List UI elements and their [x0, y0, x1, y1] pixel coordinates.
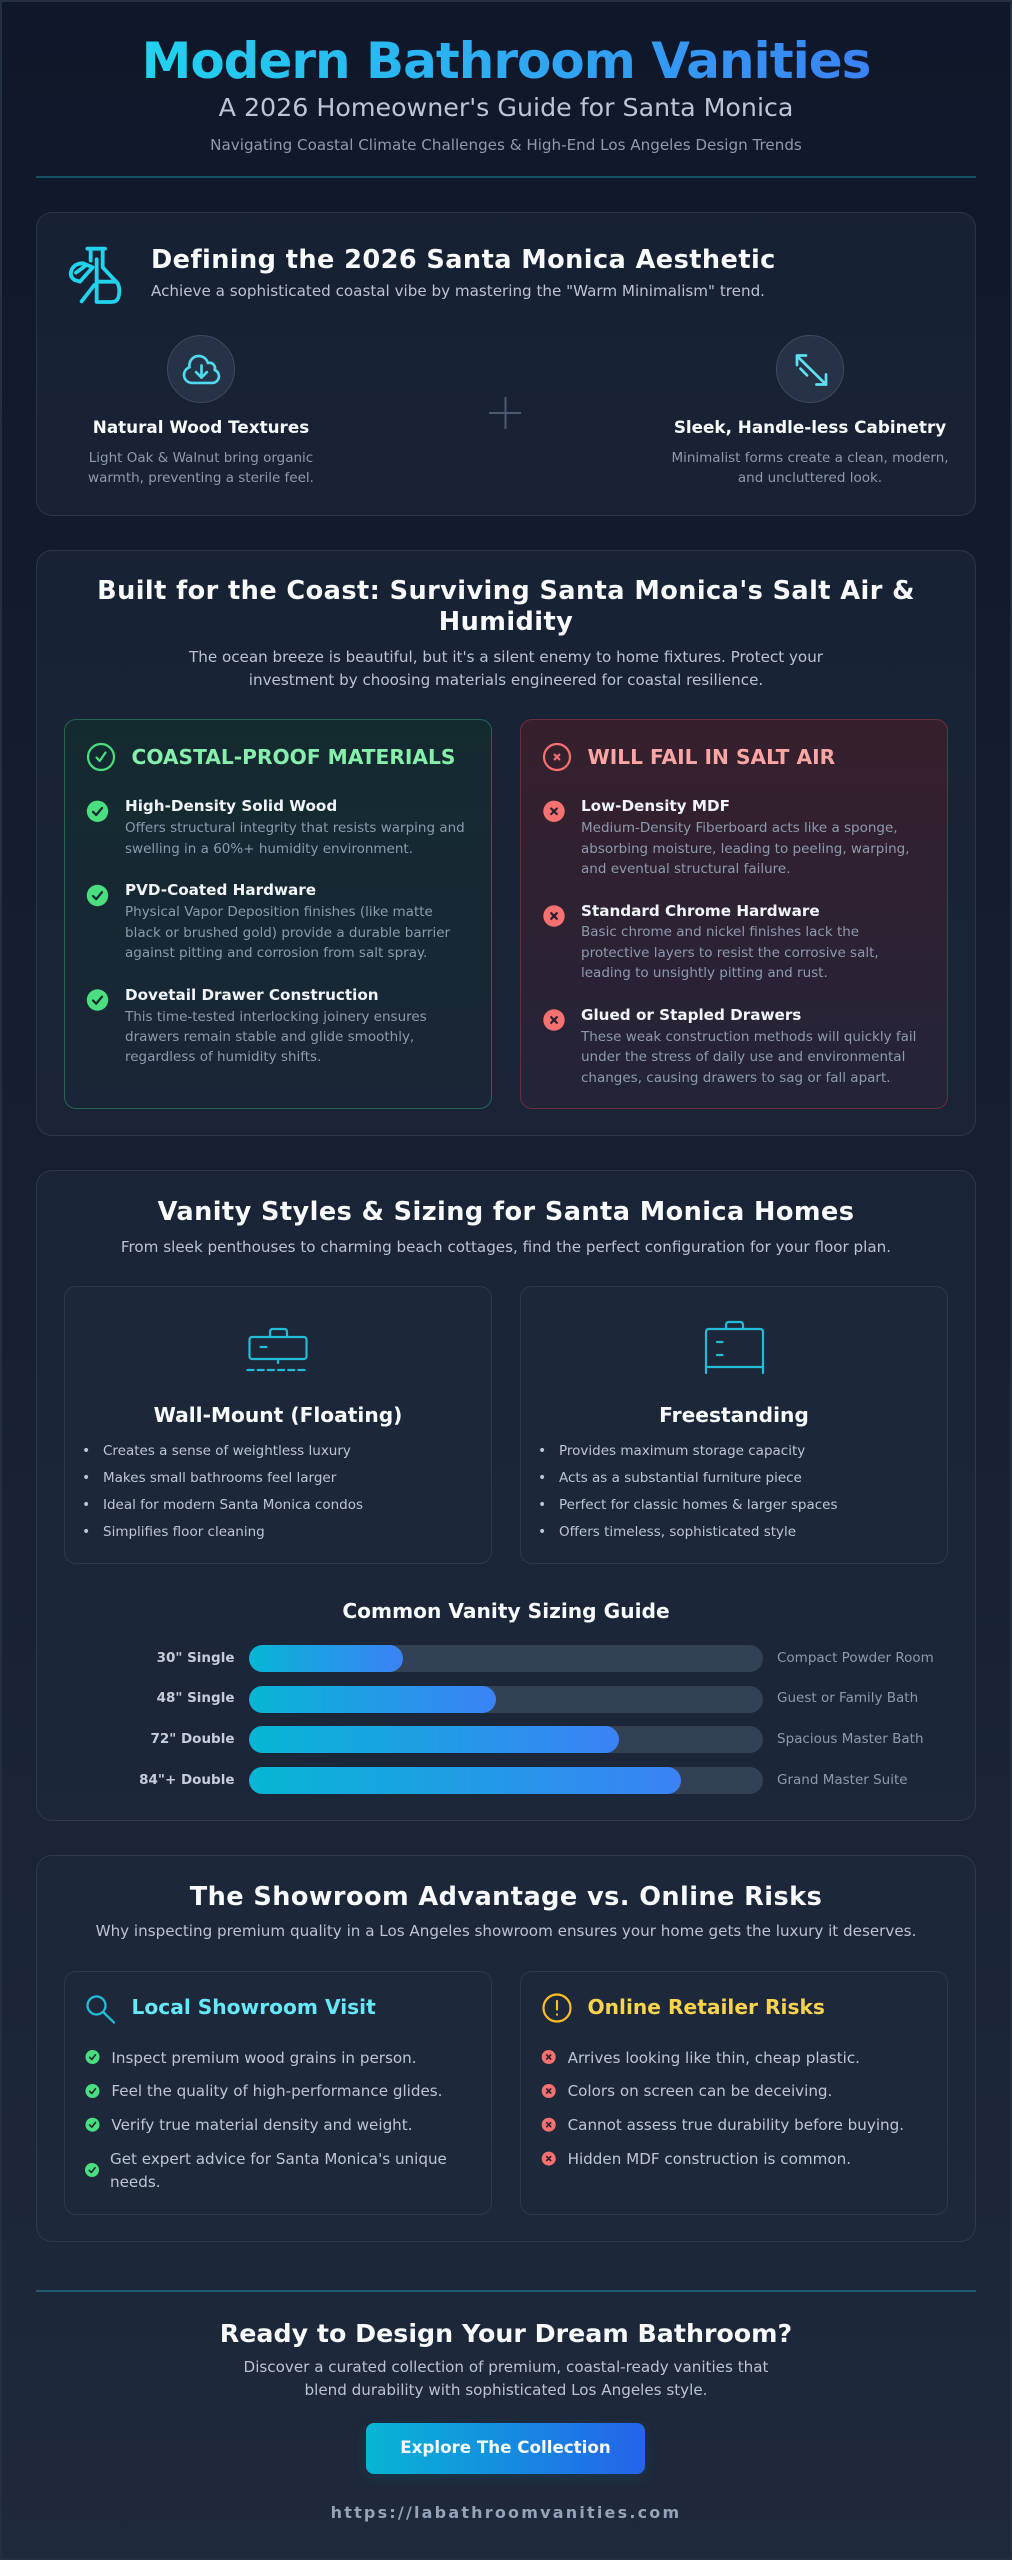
panel heading: WILL FAIL IN SALT AIR: [588, 745, 835, 769]
panel: vanity styles and sizing: [36, 1170, 976, 1821]
feature list: Simplifies floor cleaning: [103, 1524, 265, 1540]
icon: check: [85, 2084, 100, 2099]
item text: swelling in a 60%+ humidity environment.: [125, 841, 413, 857]
panel: coastal materials: [36, 550, 976, 1136]
icon: check: [85, 2050, 100, 2065]
item text: Verify true material density and weight.: [111, 2116, 413, 2134]
bar note: Grand Master Suite: [777, 1772, 908, 1788]
item text: Arrives looking like thin, cheap plastic.: [568, 2049, 860, 2067]
item text: black or brushed gold) provide a durable barrier: [125, 925, 450, 941]
item text: Inspect premium wood grains in person.: [111, 2049, 417, 2067]
title: Modern Bathroom Vanities: [142, 32, 870, 90]
item: plastic: [536, 2045, 932, 2070]
item text: and eventual structural failure.: [581, 861, 791, 877]
panel: aesthetic: [36, 212, 976, 516]
bar chart: sizing guide: [139, 1599, 934, 1794]
item text: [581, 820, 910, 877]
style title: Wall-Mount (Floating): [154, 1403, 402, 1427]
feature list: Ideal for modern Santa Monica condos: [103, 1497, 363, 1513]
icon: x: [543, 905, 565, 927]
feature list: •: [82, 1524, 90, 1540]
item: solid wood: [86, 797, 465, 857]
icon: check: [86, 800, 108, 822]
icon: x: [541, 2050, 556, 2065]
footer call to action: [36, 2290, 976, 2535]
feature list: Creates a sense of weightless luxury: [103, 1443, 351, 1459]
item text: Basic chrome and nickel finishes lack the: [581, 924, 859, 940]
item title: High-Density Solid Wood: [125, 797, 337, 815]
item text: [125, 904, 450, 961]
item title: Standard Chrome Hardware: [581, 902, 820, 920]
item: mdf: [543, 797, 910, 877]
icon: floating vanity: [246, 1328, 308, 1372]
item: inspect: [86, 2049, 417, 2067]
item: expert advice: [80, 2146, 476, 2196]
item text: Offers structural integrity that resists warping and: [125, 820, 465, 836]
panel: coastal-proof materials: [64, 719, 492, 1109]
item text: drawers remain stable and glide smoothly,: [125, 1029, 414, 1045]
item text: Cannot assess true durability before buying.: [568, 2116, 904, 2134]
item: hidden mdf: [536, 2146, 932, 2171]
icon: magnifier: [86, 1995, 116, 2024]
item: density: [80, 2112, 476, 2137]
item text: absorbing moisture, leading to peeling, warping,: [581, 841, 910, 857]
item title: Dovetail Drawer Construction: [125, 986, 379, 1004]
feature list: •: [538, 1470, 546, 1486]
header divider: [36, 176, 976, 178]
section heading: [97, 576, 915, 637]
header: [36, 32, 976, 178]
style title: Freestanding: [659, 1403, 809, 1427]
bar track: [249, 1645, 763, 1672]
panel: will fail in salt air: [520, 719, 948, 1109]
feature description: [671, 450, 949, 486]
icon: check: [86, 884, 108, 906]
item text: Colors on screen can be deceiving.: [568, 2082, 832, 2100]
panel: showroom vs online: [36, 1855, 976, 2242]
bar label: 30" Single: [157, 1650, 234, 1666]
feature list: •: [538, 1497, 546, 1513]
feature list: [82, 1443, 363, 1540]
icon: x: [541, 2118, 556, 2133]
feature list: Offers timeless, sophisticated style: [559, 1524, 796, 1540]
item text: Physical Vapor Deposition finishes (like matte: [125, 904, 433, 920]
feature description: Light Oak & Walnut bring organic: [89, 450, 313, 466]
item: dovetail drawers: [86, 986, 427, 1065]
section heading: The Showroom Advantage vs. Online Risks: [190, 1882, 822, 1912]
item: colors: [536, 2079, 932, 2104]
button: [366, 2423, 645, 2474]
bar track: [249, 1686, 763, 1712]
panel: wall-mount: [64, 1286, 492, 1564]
icon: cloud download: [167, 335, 235, 403]
bar label: 48" Single: [157, 1690, 234, 1706]
item text: protective layers to resist the corrosive salt,: [581, 945, 879, 961]
item text: [581, 924, 879, 981]
item text: Get expert advice for Santa Monica's unique: [110, 2150, 447, 2168]
item: durability: [536, 2112, 932, 2137]
bar label: 84"+ Double: [139, 1772, 234, 1788]
feature description: warmth, preventing a sterile feel.: [88, 470, 314, 486]
item text: [125, 820, 465, 857]
feature: natural wood textures: [88, 335, 314, 486]
footer divider: [36, 2290, 976, 2292]
icon: check: [85, 2118, 100, 2133]
feature list: [538, 1443, 838, 1540]
icon: check circle: [86, 742, 116, 772]
section heading: Built for the Coast: Surviving Santa Monica's Salt Air &: [97, 576, 915, 606]
icon: x circle: [542, 742, 572, 772]
section heading: Humidity: [439, 607, 573, 637]
feature list: •: [82, 1443, 90, 1459]
icon: x: [543, 1009, 565, 1031]
icon: x: [541, 2084, 556, 2099]
item title: PVD-Coated Hardware: [125, 881, 316, 899]
feature title: Sleek, Handle-less Cabinetry: [674, 417, 946, 437]
bar: 30 inch: [157, 1645, 934, 1672]
item text: under the stress of daily use and environmental: [581, 1049, 905, 1065]
item text: [110, 2148, 447, 2194]
item text: These weak construction methods will quickly fail: [581, 1029, 916, 1045]
bar label: 72" Double: [150, 1731, 234, 1747]
feature title: Natural Wood Textures: [93, 417, 309, 437]
section description: Why inspecting premium quality in a Los Angeles showroom ensures your home gets the luxury it deserves.: [96, 1922, 916, 1940]
item text: Hidden MDF construction is common.: [568, 2150, 851, 2168]
item text: [580, 1029, 916, 1086]
item text: Medium-Density Fiberboard acts like a sponge,: [581, 820, 898, 836]
feature description: [88, 450, 314, 486]
item text: [124, 1009, 427, 1065]
icon: diagonal resize: [776, 335, 844, 403]
tagline: Navigating Coastal Climate Challenges & High-End Los Angeles Design Trends: [210, 136, 802, 154]
item title: Low-Density MDF: [581, 797, 730, 815]
bar track: [249, 1726, 763, 1753]
item: glides: [80, 2079, 476, 2104]
section description: From sleek penthouses to charming beach cottages, find the perfect configuration for your floor plan.: [121, 1238, 891, 1256]
panel: local showroom visit: [64, 1971, 492, 2215]
icon: check: [86, 989, 108, 1011]
website url: https://labathroomvanities.com: [331, 2503, 681, 2522]
item text: needs.: [110, 2173, 161, 2191]
section description: Achieve a sophisticated coastal vibe by mastering the "Warm Minimalism" trend.: [151, 282, 765, 300]
item: chrome: [543, 902, 879, 981]
icon: freestanding vanity: [704, 1320, 764, 1374]
bar: 72 inch: [150, 1726, 924, 1753]
feature list: Acts as a substantial furniture piece: [559, 1470, 802, 1486]
panel: online retailer risks: [520, 1971, 948, 2215]
bar track: [249, 1767, 763, 1794]
feature list: Makes small bathrooms feel larger: [103, 1470, 336, 1486]
chart title: Common Vanity Sizing Guide: [342, 1599, 670, 1623]
cta heading: Ready to Design Your Dream Bathroom?: [220, 2319, 792, 2348]
feature list: Provides maximum storage capacity: [559, 1443, 805, 1459]
cta text: Discover a curated collection of premium, coastal-ready vanities that: [244, 2358, 768, 2376]
bar note: Guest or Family Bath: [777, 1690, 918, 1706]
cta text: [36, 2356, 976, 2403]
bar note: Spacious Master Bath: [777, 1731, 924, 1747]
panel heading: Online Retailer Risks: [588, 1995, 825, 2019]
bar: 84 inch: [139, 1767, 908, 1794]
feature list: •: [538, 1524, 546, 1540]
section description: [188, 648, 823, 689]
bar note: Compact Powder Room: [777, 1650, 934, 1666]
item text: This time-tested interlocking joinery ensures: [125, 1009, 427, 1025]
icon: x: [543, 800, 565, 822]
item: pvd hardware: [86, 881, 450, 961]
panel heading: Local Showroom Visit: [132, 1995, 376, 2019]
feature: handle-less cabinetry: [671, 335, 949, 486]
feature list: •: [82, 1497, 90, 1513]
item text: Feel the quality of high-performance glides.: [111, 2082, 442, 2100]
feature list: •: [82, 1470, 90, 1486]
item text: changes, causing drawers to sag or fall apart.: [581, 1070, 891, 1086]
icon: plus: [489, 397, 521, 429]
panel: freestanding: [520, 1286, 948, 1564]
item: glued drawers: [543, 1006, 916, 1086]
section heading: Vanity Styles & Sizing for Santa Monica Homes: [158, 1197, 854, 1227]
button label: Explore The Collection: [400, 2437, 611, 2457]
section description: investment by choosing materials engineered for coastal resilience.: [249, 671, 763, 689]
item title: Glued or Stapled Drawers: [581, 1006, 801, 1024]
icon: x: [541, 2151, 556, 2166]
feature description: Minimalist forms create a clean, modern,: [671, 450, 949, 466]
feature description: and uncluttered look.: [738, 470, 882, 486]
subtitle: A 2026 Homeowner's Guide for Santa Monica: [219, 93, 793, 122]
icon: warning: [542, 1993, 572, 2023]
item text: leading to unsightly pitting and rust.: [581, 965, 828, 981]
bar: 48 inch: [157, 1686, 918, 1713]
panel heading: COASTAL-PROOF MATERIALS: [132, 745, 455, 769]
icon: flask and tools: [68, 246, 122, 304]
section description: The ocean breeze is beautiful, but it's a silent enemy to home fixtures. Protect your: [189, 648, 823, 666]
item text: regardless of humidity shifts.: [125, 1049, 321, 1065]
cta text: blend durability with sophisticated Los Angeles style.: [305, 2381, 707, 2399]
feature list: •: [538, 1443, 546, 1459]
feature list: Perfect for classic homes & larger spaces: [559, 1497, 838, 1513]
icon: check: [85, 2163, 100, 2178]
section heading: Defining the 2026 Santa Monica Aesthetic: [151, 245, 776, 275]
item text: against pitting and corrosion from salt spray.: [125, 945, 427, 961]
